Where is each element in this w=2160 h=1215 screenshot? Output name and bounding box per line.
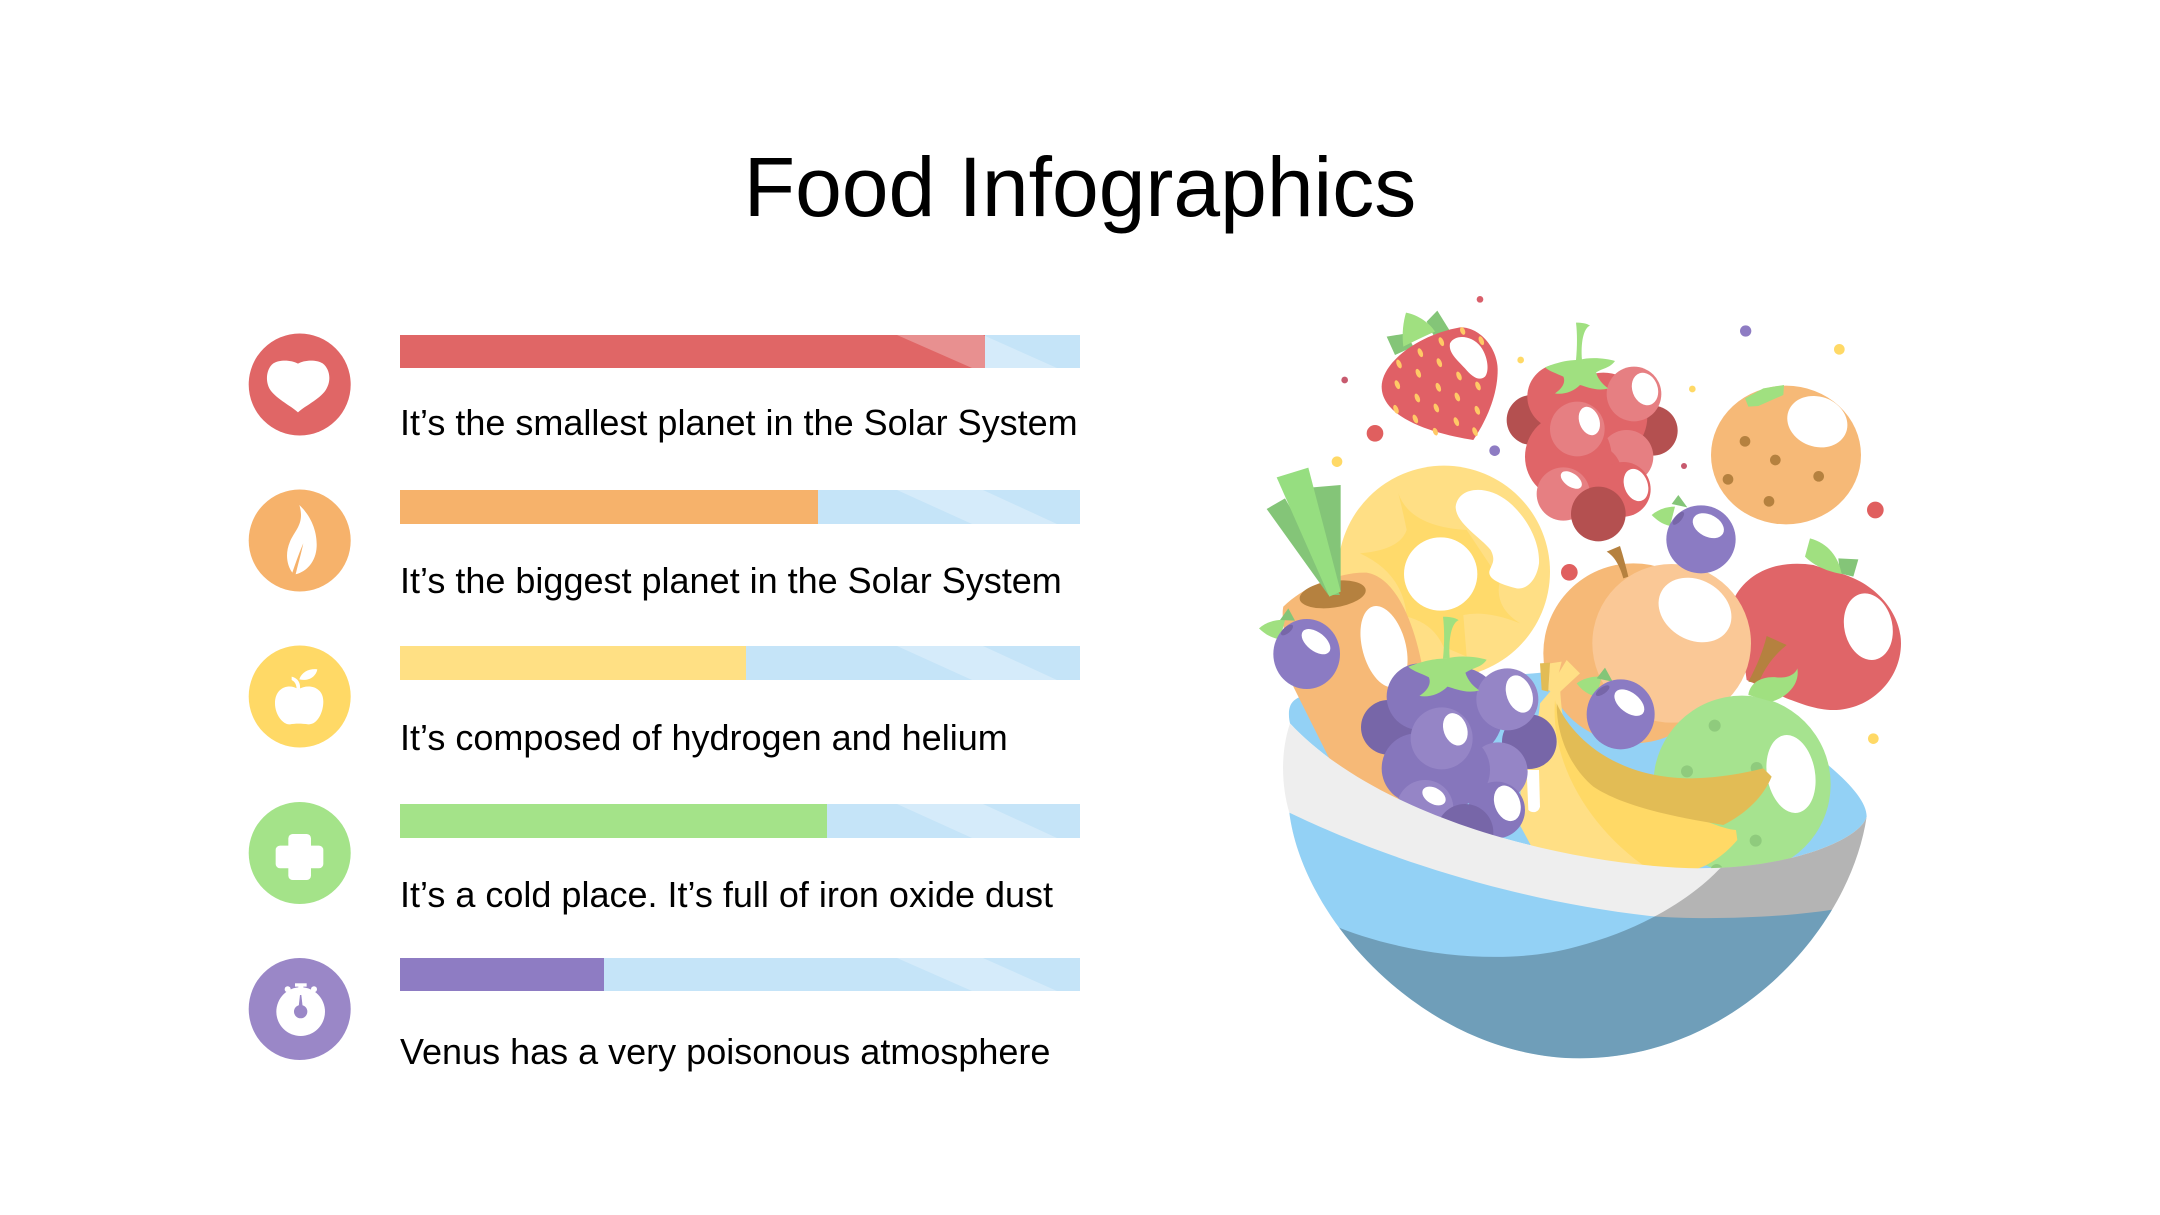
- row 3: apple: [249, 646, 1080, 758]
- banana: [1519, 660, 1772, 870]
- bar: 61 percent: [400, 490, 1080, 524]
- bar: 86 percent: [400, 335, 1080, 368]
- confetti dots: [1332, 296, 1884, 744]
- illustration: fruit bowl: [1259, 296, 1901, 1080]
- icon: stopwatch: [249, 958, 351, 1060]
- row 2: leaf: [249, 490, 1080, 601]
- grapes: [1361, 617, 1557, 861]
- row 5: stopwatch: [249, 958, 1080, 1072]
- raspberry: [1507, 323, 1678, 541]
- blueberry lower middle: [1577, 668, 1655, 749]
- bowl front: [1283, 724, 1866, 1058]
- red apple: [1735, 538, 1901, 710]
- bar: 30 percent: [400, 958, 1080, 991]
- bar: 63 percent: [400, 804, 1080, 838]
- strawberry: [1382, 311, 1498, 440]
- text: It’s composed of hydrogen and helium: [400, 717, 1008, 758]
- icon: flame leaf: [249, 490, 351, 592]
- icon: heart: [249, 334, 351, 436]
- blueberry on carrot: [1259, 608, 1340, 689]
- bar: 51 percent: [400, 646, 1080, 680]
- peach: [1543, 546, 1751, 743]
- row 1: heart: [249, 334, 1080, 443]
- title: Food Infographics: [744, 140, 1416, 234]
- icon: cross: [249, 802, 351, 904]
- text: It’s the smallest planet in the Solar System: [400, 402, 1078, 443]
- text: It’s a cold place. It’s full of iron oxide dust: [400, 874, 1053, 915]
- orange: [1711, 385, 1861, 524]
- green apple: [1653, 668, 1831, 876]
- text: Venus has a very poisonous atmosphere: [400, 1031, 1050, 1072]
- pineapple ring: [1338, 466, 1550, 678]
- text: It’s the biggest planet in the Solar System: [400, 560, 1062, 601]
- icon: apple: [249, 646, 351, 748]
- row 4: cross: [249, 802, 1080, 915]
- bowl interior: [1289, 672, 1867, 868]
- carrot: [1267, 468, 1447, 847]
- blueberry upper right: [1652, 495, 1736, 573]
